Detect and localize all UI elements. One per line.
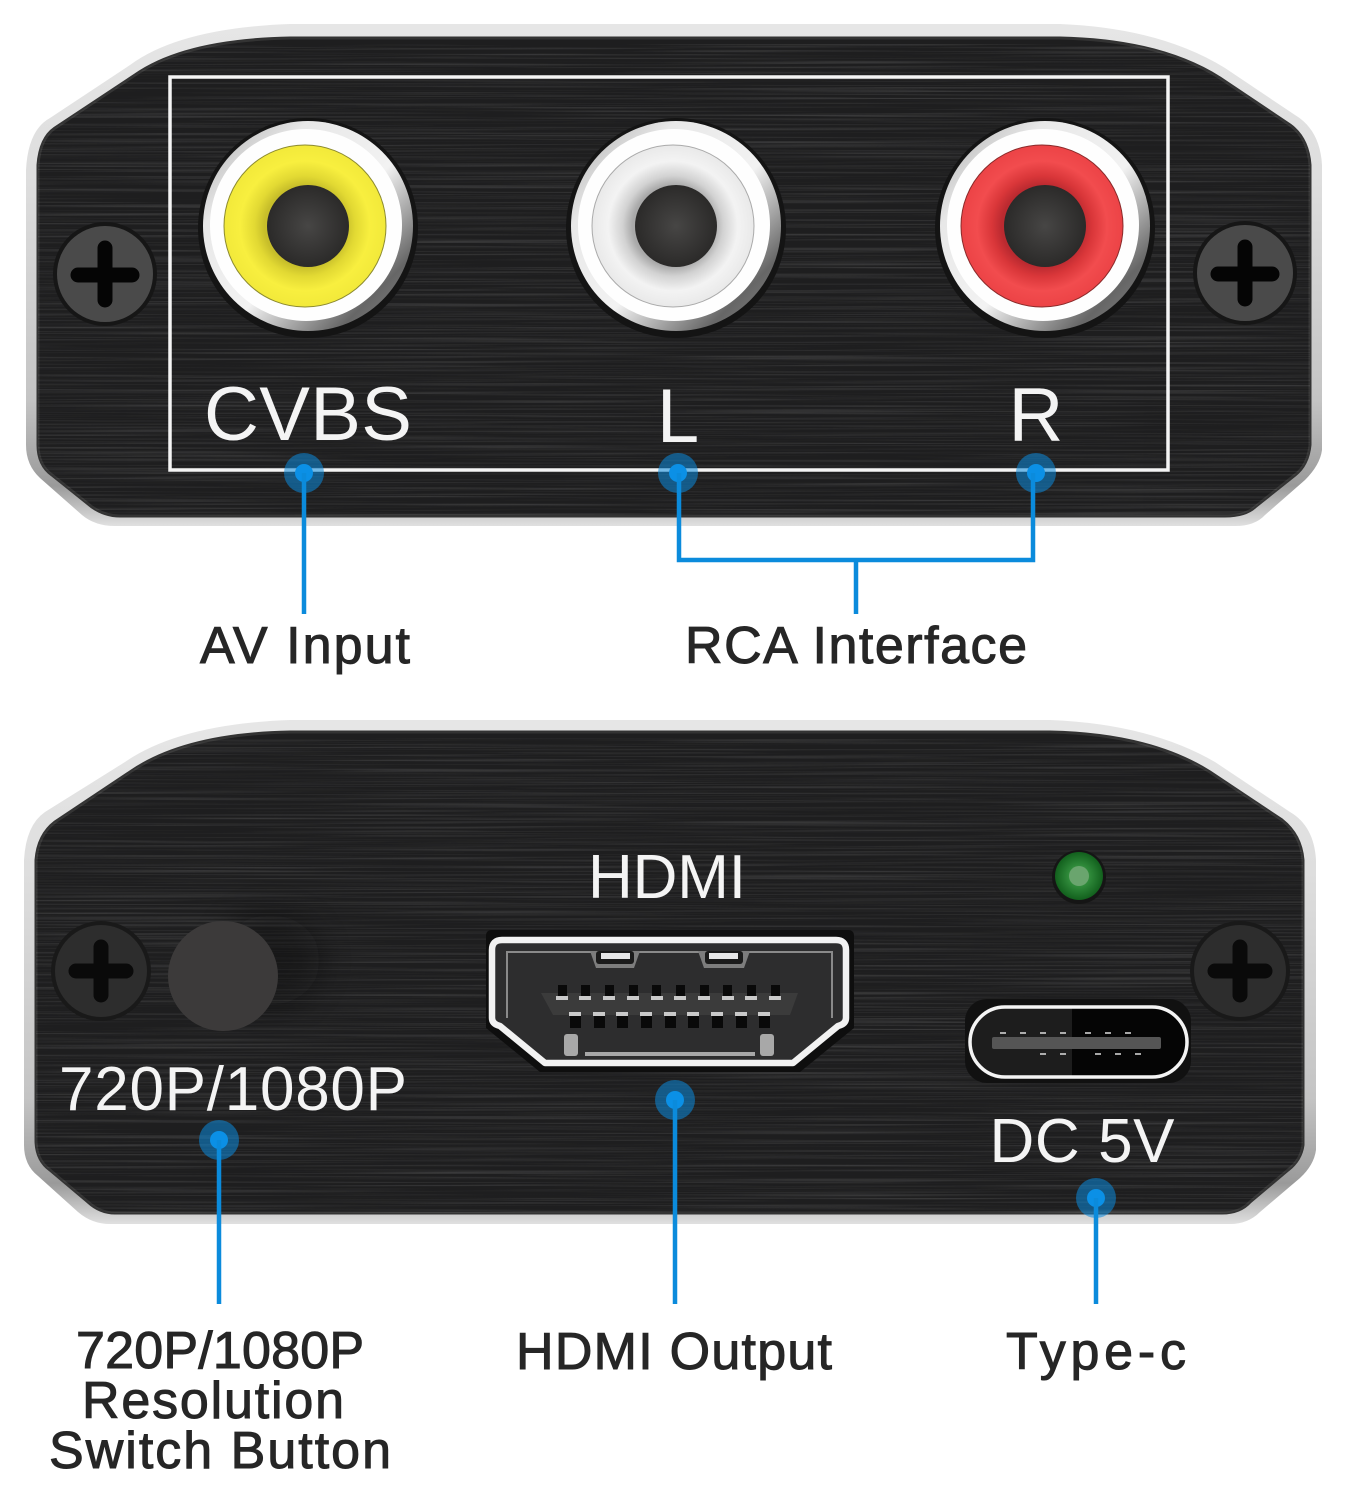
callout: Resolution Switch Button: Switch Button xyxy=(49,1422,391,1480)
callout: HDMI Output: HDMI Output xyxy=(516,1323,833,1381)
contact tongue xyxy=(541,993,798,1015)
callout: Resolution Switch Button: Resolution xyxy=(82,1372,344,1430)
callout: AV Input: AV Input xyxy=(200,617,411,675)
text: L: L xyxy=(657,374,699,459)
device casing top xyxy=(26,24,1322,526)
icon: Type-C port xyxy=(965,999,1191,1083)
port bottom clips xyxy=(564,1034,774,1056)
panel: RCA input side of device xyxy=(26,24,1322,526)
icon: left screw xyxy=(51,921,151,1021)
text: DC 5V print: DC 5V xyxy=(990,1107,1175,1176)
callout: Resolution Switch Button: 720P/1080P xyxy=(76,1322,364,1380)
icon: status LED xyxy=(1052,850,1106,904)
callout: Type-c: Type-c xyxy=(1006,1323,1186,1381)
icon: HDMI port xyxy=(486,930,854,1072)
port inner edge xyxy=(507,952,832,1018)
icon: white L jack xyxy=(566,118,786,338)
icon: red R jack xyxy=(935,118,1155,338)
icon: resolution switch button xyxy=(168,915,320,1031)
callout: AV Input xyxy=(200,453,411,675)
callout: Resolution Switch Button xyxy=(49,1120,391,1480)
port group frame xyxy=(170,77,1168,470)
port top latches xyxy=(590,951,750,968)
callout: HDMI Output xyxy=(516,1080,833,1381)
icon: right screw xyxy=(1190,921,1290,1021)
callout: RCA Interface: RCA Interface xyxy=(685,617,1027,675)
text: HDMI print: HDMI xyxy=(588,843,746,912)
icon: yellow CVBS jack xyxy=(198,118,418,338)
device casing bottom xyxy=(24,720,1316,1224)
icon: left screw xyxy=(53,222,157,326)
text: 720P/1080P print: 720P/1080P xyxy=(59,1055,407,1124)
panel: HDMI output side of device xyxy=(24,720,1316,1224)
icon: right screw xyxy=(1193,221,1297,325)
callout: Type-c xyxy=(1006,1178,1186,1381)
top row pins xyxy=(558,985,780,1028)
text: R: R xyxy=(1009,373,1063,458)
callout: RCA Interface xyxy=(658,453,1056,675)
text: CVBS: CVBS xyxy=(204,372,412,457)
